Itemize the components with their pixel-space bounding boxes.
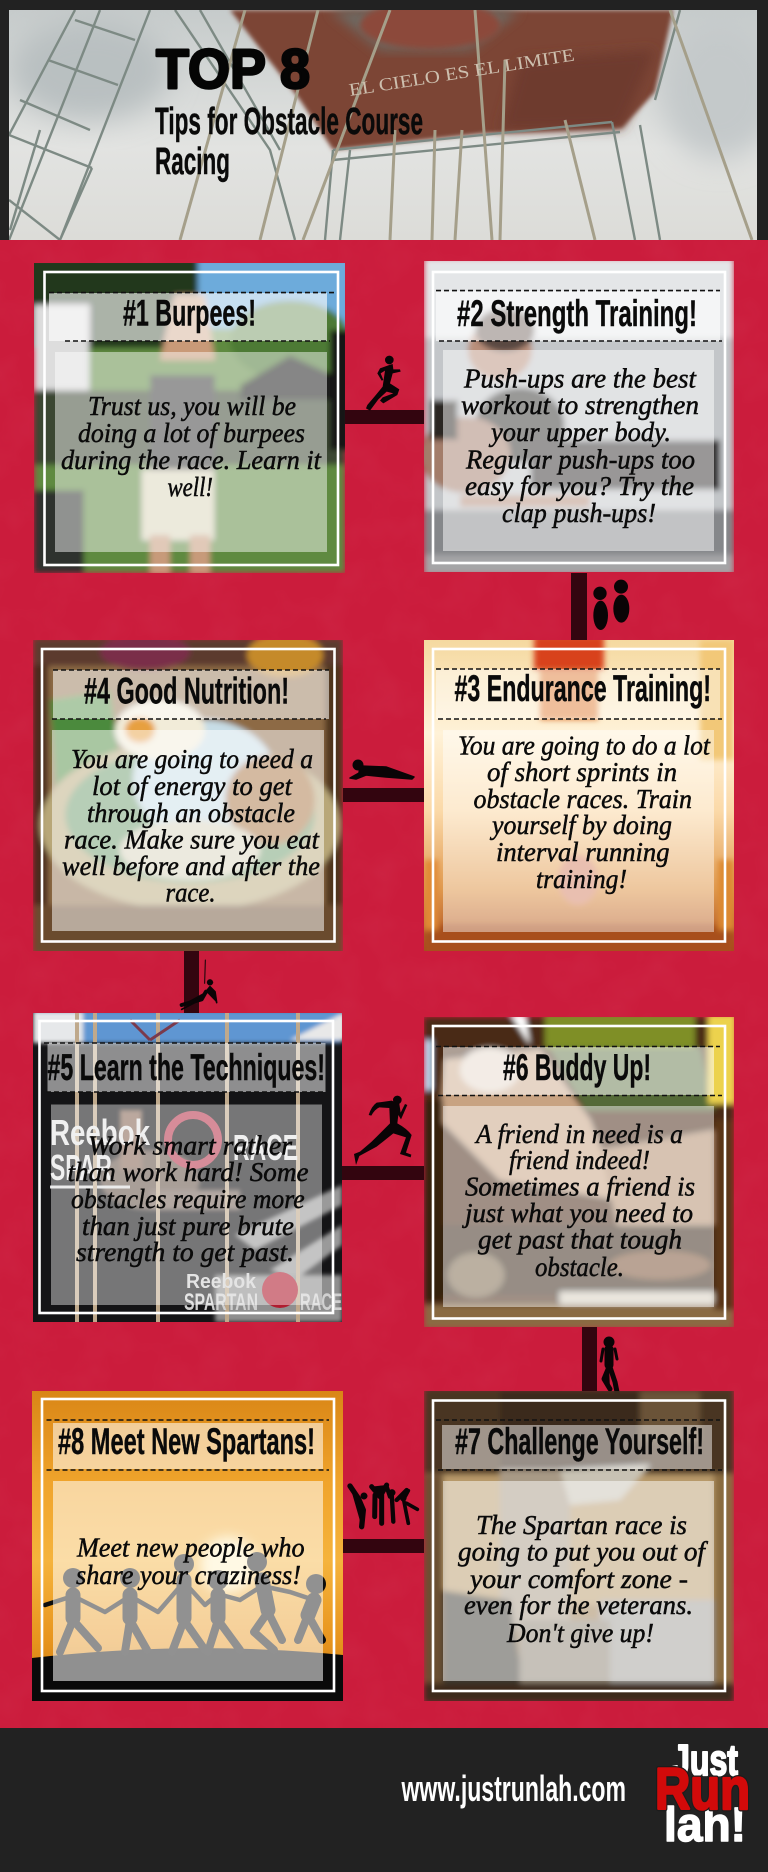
- icon: footprints: [593, 580, 629, 630]
- white frame: [42, 649, 334, 942]
- subtitle: [155, 101, 423, 183]
- photo: plate of nasi lemak: [33, 633, 343, 955]
- body text: yourself by doing: [489, 810, 672, 840]
- body text: going to put you out of: [458, 1536, 709, 1566]
- body text: Sometimes a friend is: [465, 1172, 695, 1202]
- body text: get past that tough: [478, 1225, 682, 1255]
- connector: 5 to 6: [342, 1166, 424, 1180]
- body text: well before and after the: [62, 851, 320, 881]
- body text: Don't give up!: [506, 1618, 654, 1648]
- body text: The Spartan race is: [476, 1510, 687, 1540]
- photo lettering: RACE: [300, 1289, 342, 1316]
- icon: push-up figure: [350, 760, 414, 779]
- body text: doing a lot of burpees: [78, 418, 305, 448]
- white frame: [433, 649, 725, 942]
- logo: Just Run lah!: lah!: [664, 1799, 746, 1852]
- dashed rules: [44, 1043, 323, 1092]
- body text: through an obstacle: [87, 798, 295, 828]
- white frame: [433, 272, 725, 563]
- body text: during the race. Learn it: [61, 445, 322, 475]
- logo: Just Run lah!: [655, 1736, 750, 1852]
- icon: jumping group: [350, 1485, 417, 1527]
- title band: [53, 1423, 323, 1469]
- connector: 2 to 3: [571, 573, 587, 640]
- photo lettering: SPARTAN: [184, 1289, 258, 1316]
- photo lettering: SPAR: [50, 1147, 112, 1188]
- body text: [462, 1119, 695, 1282]
- text background: [51, 1104, 322, 1305]
- panel: tip 1 burpees: [28, 258, 350, 575]
- panel: tip 4 good nutrition: [33, 633, 343, 955]
- body text: well!: [168, 472, 213, 502]
- body text: obstacle.: [535, 1252, 624, 1282]
- body text: Push-ups are the best: [463, 364, 697, 394]
- dashed rules: [52, 670, 329, 719]
- body text: You are going to need a: [71, 744, 313, 774]
- body text: your comfort zone -: [467, 1564, 688, 1594]
- photo: runner at sunset: [424, 635, 734, 955]
- icon: rope climber: [182, 960, 217, 1009]
- photo lettering: Reebok: [50, 1112, 151, 1153]
- body text: clap push-ups!: [502, 498, 656, 528]
- body text: obstacle races. Train: [474, 784, 692, 814]
- body text: A friend in need is a: [474, 1119, 683, 1149]
- text background: [443, 1481, 714, 1681]
- body text: easy for you? Try the: [465, 471, 694, 501]
- text background: [55, 352, 327, 552]
- connector: 4 to 5: [184, 951, 199, 1013]
- dashed rules: [49, 293, 335, 341]
- connector: 6 to 7: [582, 1327, 597, 1391]
- text background: [443, 1106, 714, 1307]
- dashed rules: [436, 669, 722, 719]
- white frame: [40, 1021, 333, 1313]
- white frame: [433, 1026, 725, 1318]
- body text: training!: [536, 864, 627, 894]
- logo: Just Run lah!: Run: [655, 1757, 750, 1822]
- silhouettes: [45, 1580, 322, 1652]
- body text: lot of energy to get: [92, 771, 293, 801]
- body text: [61, 391, 322, 502]
- header photo: [9, 1, 768, 240]
- body text: Trust us, you will be: [88, 391, 296, 421]
- subtitle: Racing: [155, 141, 230, 183]
- body text: strength to get past.: [76, 1237, 294, 1267]
- photo: mud splash: [424, 1388, 734, 1703]
- dashed rules: [46, 1420, 329, 1470]
- subtitle: Tips for Obstacle Course: [155, 101, 423, 143]
- title band: [436, 291, 720, 341]
- panel: tip 6 buddy up: [424, 1014, 736, 1329]
- text background: [443, 730, 714, 932]
- icon: running figure: [601, 1337, 618, 1397]
- body text: than just pure brute: [82, 1211, 294, 1241]
- body text: [76, 1533, 305, 1590]
- body text: [68, 1131, 309, 1267]
- body text: workout to strengthen: [461, 390, 699, 420]
- photo lettering: RACE: [233, 1127, 298, 1168]
- body text: obstacles require more: [71, 1184, 305, 1214]
- body text: You are going to do a lot: [458, 731, 711, 761]
- panel: red background: [0, 240, 768, 1728]
- panel: tip 7 challenge yourself: [424, 1388, 734, 1703]
- body text: just what you need to: [462, 1198, 693, 1228]
- text background: [52, 730, 324, 931]
- panel: tip 8 meet new spartans: [32, 1391, 343, 1701]
- white frame: [42, 1399, 334, 1691]
- white frame: [44, 272, 338, 565]
- connector: 7 to 8: [343, 1539, 424, 1553]
- panel: tip 5 learn the techniques: [33, 1010, 345, 1322]
- dashed rules: [436, 291, 722, 341]
- text background: [53, 1481, 323, 1681]
- text background: [443, 350, 714, 551]
- website url: www.justrunlah.com: [401, 1768, 626, 1809]
- title band: [49, 293, 327, 341]
- title band: [53, 670, 329, 719]
- title band: [436, 669, 720, 719]
- heading: #4 Good Nutrition!: [84, 671, 289, 712]
- body text: than work hard! Some: [68, 1157, 309, 1187]
- connector: 3 to 4: [343, 788, 424, 802]
- title band: [48, 1043, 326, 1092]
- logo: Just Run lah!: Just: [672, 1736, 738, 1785]
- body text: your upper body.: [488, 417, 671, 447]
- body text: interval running: [496, 837, 670, 867]
- banner lettering: EL CIELO ES EL LIMITE: [347, 45, 576, 100]
- body text: of short sprints in: [487, 757, 677, 787]
- body text: race. Make sure you eat: [64, 825, 320, 855]
- title: Top 8: TOP 8: [156, 37, 310, 100]
- photo lettering: [50, 1112, 342, 1316]
- logo: Just Run lah!: Run: [655, 1757, 750, 1822]
- panel: tip 3 endurance training: [424, 635, 734, 955]
- body text: [458, 731, 711, 894]
- connector: 1 to 2: [345, 410, 424, 424]
- body text: share your craziness!: [76, 1560, 301, 1590]
- body text: friend indeed!: [509, 1145, 650, 1175]
- photo: athlete on field: [28, 258, 350, 575]
- panel: tip 2 strength training: [420, 258, 734, 575]
- icon: large runner: [354, 1096, 412, 1165]
- body text: [461, 364, 699, 528]
- icon: runner on connector 1: [366, 356, 401, 411]
- dashed rules: [436, 1046, 722, 1096]
- body text: even for the veterans.: [464, 1590, 693, 1620]
- title band: [442, 1425, 712, 1469]
- photo: push-ups in gym: [420, 258, 734, 575]
- heading: #5 Learn the Techniques!: [48, 1047, 325, 1088]
- heading: #8 Meet New Spartans!: [58, 1421, 315, 1462]
- body text: [62, 744, 320, 908]
- dashed rules: [436, 1420, 722, 1470]
- white frame: [433, 1400, 725, 1691]
- heading: #6 Buddy Up!: [503, 1047, 651, 1088]
- panel: footer: [0, 1728, 768, 1872]
- photo: teammates in mud: [424, 1014, 736, 1329]
- photo: silhouettes at sunset: [32, 1391, 343, 1701]
- photo lettering: Reebok: [186, 1271, 257, 1293]
- body text: race.: [166, 878, 216, 908]
- body text: [458, 1510, 709, 1648]
- title band: [443, 1047, 714, 1095]
- photo: rope obstacle: [33, 1010, 345, 1322]
- body text: Meet new people who: [76, 1533, 305, 1563]
- body text: Regular push-ups too: [465, 444, 695, 474]
- body text: Work smart rather: [88, 1131, 292, 1161]
- panel: header photo with title: [9, 1, 768, 240]
- heading: #1 Burpees!: [123, 292, 256, 334]
